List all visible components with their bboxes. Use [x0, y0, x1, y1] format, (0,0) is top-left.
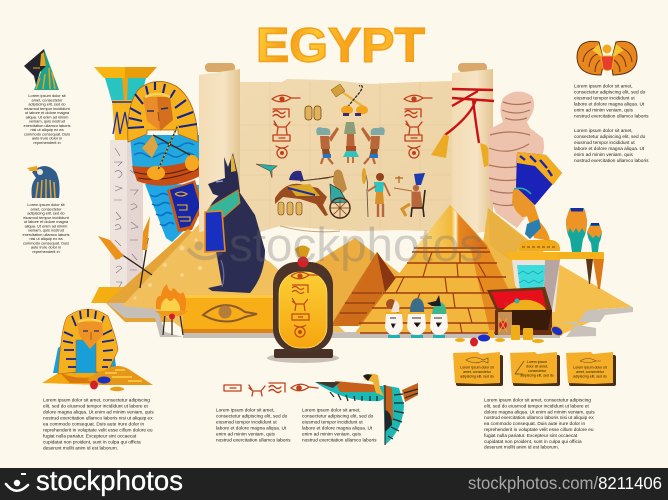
text block: sphinx: Lorem ipsum dolor sit amet, consectetur adipiscing — [43, 398, 150, 404]
text block: anubis: reprehenderit in — [33, 140, 61, 145]
bust neck and shoulder — [522, 204, 550, 241]
stone cartouche — [267, 246, 339, 363]
sarcophagus of pharaoh — [128, 81, 205, 242]
text block: middle 2: labore et dolore magna aliqua. Ut — [302, 426, 373, 432]
text block: falcon: nisi ut aliquip ex ea — [29, 236, 63, 241]
gold box with eye — [183, 295, 273, 333]
footer logo — [6, 474, 28, 491]
tablet 1: Lorem ipsum dolor sit — [460, 366, 494, 370]
text block: top right 1: eiusmod tempor incididunt ut — [574, 96, 635, 102]
tablet 2: adipiscing elit, sed do — [520, 374, 554, 378]
text block: middle 1: eiusmod tempor incididunt ut — [216, 420, 277, 426]
text block: anubis: aliqua. Ut enim ad minim — [26, 114, 68, 119]
ground shadow right — [560, 307, 633, 337]
text block: top right 2: consectetur adipiscing elit, sed do — [574, 134, 646, 140]
sarcophagus chest — [130, 135, 203, 172]
cartouche glyphs — [291, 272, 318, 337]
treasure chest with coins — [455, 287, 564, 346]
tablet 2: consectetur — [528, 369, 547, 373]
sand pyramid back left — [106, 229, 290, 322]
red rope with tassels — [431, 89, 499, 167]
text block: anubis: commodo consequat. Duis — [24, 131, 70, 136]
text block: falcon: amet, consectetur — [31, 206, 62, 211]
ground shadow left — [107, 303, 183, 337]
tablet 1 — [453, 352, 503, 386]
falcon with spread wings — [315, 374, 418, 445]
text block: sphinx: cupidatat non proident, sunt in culpa qui officia — [43, 440, 141, 446]
sand pyramid right — [470, 208, 633, 337]
sphinx face — [77, 322, 103, 349]
eye symbol — [203, 305, 257, 322]
papyrus scroll — [199, 63, 499, 238]
column with hieroglyphs — [91, 67, 157, 303]
text block: sphinx: deserunt mollit anim id est laborum. — [43, 446, 118, 452]
tablet 3: Lorem ipsum dolor sit — [573, 366, 607, 370]
ground shadow — [183, 332, 560, 338]
text block: bottom right: ea commodo consequat. Duis aute irure dolor in — [484, 421, 585, 427]
jar human — [385, 299, 403, 338]
text block: middle 2: enim ad minim veniam, quis — [302, 432, 361, 438]
scarab emblem — [577, 41, 637, 75]
crook and flail — [153, 125, 190, 170]
figure right — [361, 127, 385, 164]
text block: middle 1: nostrud exercitation ullamco laboris — [216, 438, 291, 444]
pharaoh face — [143, 97, 173, 131]
text block: middle 2: nostrud exercitation ullamco laboris — [302, 438, 377, 444]
torch with flames — [155, 284, 188, 335]
vases — [566, 208, 602, 252]
bust base — [519, 240, 560, 251]
crossed arms — [132, 158, 202, 186]
jar falcon — [407, 298, 426, 338]
text block: bottom right: cupidatat non proident, sunt in culpa qui officia — [484, 439, 582, 445]
anubis icon — [24, 49, 59, 90]
text block: anubis: ut labore et dolore magna — [25, 110, 70, 115]
bust crown — [516, 152, 562, 205]
coin stacks — [455, 325, 544, 343]
text block: top right 1: enim ad minim veniam, quis — [574, 108, 633, 114]
sphinx shoulders — [53, 345, 117, 373]
text block: anubis: nisi ut aliquip ex ea — [30, 127, 64, 132]
vase small — [587, 223, 602, 252]
papyrus sheet — [238, 79, 452, 232]
scarab on cartouche — [295, 246, 310, 268]
mummy — [488, 91, 544, 228]
text block: top right 2: eiusmod tempor incididunt ut — [574, 140, 635, 146]
small cartouche top — [305, 106, 321, 120]
sphinx treasure pile — [87, 366, 153, 385]
footer brand: stockphotos — [36, 465, 183, 496]
jar jackal — [427, 295, 448, 338]
text block: falcon: exercitation ullamco laboris — [23, 232, 70, 237]
figure left — [316, 127, 339, 164]
text block: top right 2: labore et dolore magna aliqua. Ut — [574, 146, 645, 152]
crossed spears — [98, 216, 152, 288]
spearman — [362, 168, 390, 217]
text block: falcon: commodo consequat. Duis — [23, 240, 69, 245]
text block: bottom right: fugiat nulla pariatur. Excepteur sint occaecat — [484, 433, 578, 439]
text block: falcon: Lorem ipsum dolor sit — [27, 202, 66, 207]
text block: middle 1: labore et dolore magna aliqua. Ut — [216, 426, 287, 432]
text block: sphinx: nostrud exercitation ullamco laboris nisi ut aliquip ex — [43, 416, 153, 422]
pyramid cap — [416, 205, 487, 247]
tablet 3 — [566, 352, 616, 386]
seated queen — [394, 173, 425, 217]
text block: bottom right: Lorem ipsum dolor sit amet, consectetur adipiscing — [484, 398, 591, 404]
small bird glyph — [256, 164, 277, 178]
text block: falcon: veniam, quis nostrud — [28, 228, 64, 232]
tablet 2: dolor sit amet, — [526, 364, 548, 368]
text block: middle 2: consectetur adipiscing elit, sed do — [302, 414, 374, 420]
tablet 2 — [510, 352, 560, 386]
tablet 3: adipiscing elit, sed do — [573, 374, 607, 378]
small cartouche bottom — [278, 202, 302, 215]
stone tablets — [453, 352, 616, 386]
text block: top right 2: enim ad minim veniam, quis — [574, 152, 633, 158]
text block: middle 1: enim ad minim veniam, quis — [216, 432, 275, 438]
text block: sphinx: fugiat nulla pariatur. Excepteur sint occaecat — [43, 434, 137, 440]
text block: falcon: ut labore et dolore magna — [24, 219, 69, 224]
chariot scene — [275, 170, 350, 218]
text block: top right 2: Lorem ipsum dolor sit amet, — [574, 128, 633, 134]
text block: sphinx: ea commodo consequat. Duis aute irure dolor in — [43, 422, 144, 428]
text block: sphinx: dolore magna aliqua. Ut enim ad minim veniam, quis — [43, 410, 154, 416]
tablet 2: Lorem ipsum — [527, 360, 547, 364]
watermark: stockphotos — [229, 219, 483, 272]
vase large — [566, 208, 587, 252]
text block: middle 1: consectetur adipiscing elit, sed do — [216, 414, 288, 420]
title: EGYPT: EGYPT — [256, 20, 425, 72]
text block: falcon: aute irure dolor in — [31, 244, 61, 250]
text block: top right 1: labore et dolore magna aliqua. Ut — [574, 102, 645, 108]
text block: middle 2: eiusmod tempor incididunt ut — [302, 420, 363, 426]
bust face — [512, 188, 535, 217]
text block: bottom right: dolore magna aliqua. Ut enim ad minim veniam, quis — [484, 409, 595, 415]
footer bar — [0, 465, 668, 500]
pedestal — [505, 252, 563, 312]
crook and flail emblem — [331, 84, 368, 116]
nemes headdress — [128, 81, 198, 142]
tablet 3: amet, consectetur — [576, 370, 605, 374]
ankh — [395, 176, 403, 183]
sphinx base — [42, 372, 120, 385]
side table — [558, 252, 604, 289]
sphinx pharaoh with treasure — [42, 309, 153, 391]
text block: sphinx: reprehenderit in voluptate velit esse cillum dolore eu — [43, 428, 153, 434]
right scroll roller — [452, 63, 493, 238]
text block: top right 1: Lorem ipsum dolor sit amet, — [574, 84, 633, 90]
jewels — [470, 338, 478, 346]
text block: anubis: Lorem ipsum dolor sit — [28, 93, 67, 98]
tablet 1: adipiscing elit, sed do — [460, 374, 494, 378]
sphinx chest — [76, 335, 97, 373]
text block: anubis: adipiscing elit, sed do — [28, 102, 66, 106]
sphinx nemes — [58, 309, 118, 374]
text block: anubis: exercitation ullamco laboris — [24, 123, 71, 128]
text block: top right 1: nostrud exercitation ullamco laboris — [574, 114, 649, 120]
text block: bottom right: reprehenderit in voluptate velit esse cillum dolore eu — [484, 427, 594, 433]
falcon head icon — [27, 166, 60, 198]
figure center — [343, 122, 359, 163]
text block: falcon: eiusmod tempor incididunt — [23, 215, 70, 220]
anubis cat — [205, 153, 265, 293]
sarcophagus lower body — [145, 184, 205, 242]
text block: anubis: veniam, quis nostrud — [29, 118, 65, 124]
sand pyramid front left — [122, 223, 345, 334]
text block: bottom right: deserunt mollit anim id est laborum. — [484, 445, 559, 451]
brown stone pyramid — [333, 252, 405, 326]
hieroglyph row — [224, 383, 318, 396]
sand pyramid center — [255, 238, 440, 326]
text block: anubis: eiusmod tempor incididunt — [24, 106, 71, 111]
text block: top right 2: nostrud exercitation ullamco laboris — [574, 158, 649, 164]
text block: falcon: adipiscing elit, sed do — [27, 210, 65, 216]
text block: bottom right: elit, sed do eiusmod tempor incididunt ut labore et — [484, 403, 590, 409]
hieroglyph column right — [404, 95, 432, 158]
text block: anubis: aute irure dolor in — [32, 136, 62, 140]
text block: middle 1: Lorem ipsum dolor sit amet, — [216, 408, 275, 414]
nefertiti bust on pedestal — [505, 152, 604, 312]
text block: falcon: reprehenderit in — [32, 249, 60, 254]
tablet 1: amet, consectetur — [463, 370, 492, 374]
brick pyramid — [355, 205, 530, 333]
footer url: stockphotos.com/8211406 — [468, 473, 662, 493]
text block: falcon: aliqua. Ut enim ad minim — [25, 223, 67, 228]
text block: middle 2: Lorem ipsum dolor sit amet, — [302, 408, 361, 414]
canopic jars — [385, 295, 448, 338]
text block: bottom right: nostrud exercitation ullamco laboris nisi ut aliquip ex — [484, 415, 594, 421]
text block: top right 1: consectetur adipiscing elit, sed do — [574, 90, 646, 96]
text block: sphinx: elit, sed do eiusmod tempor incididunt ut labore et — [43, 404, 149, 410]
left scroll roller — [199, 63, 240, 232]
text block: anubis: amet, consectetur — [32, 97, 63, 102]
hieroglyph column left — [272, 95, 300, 158]
